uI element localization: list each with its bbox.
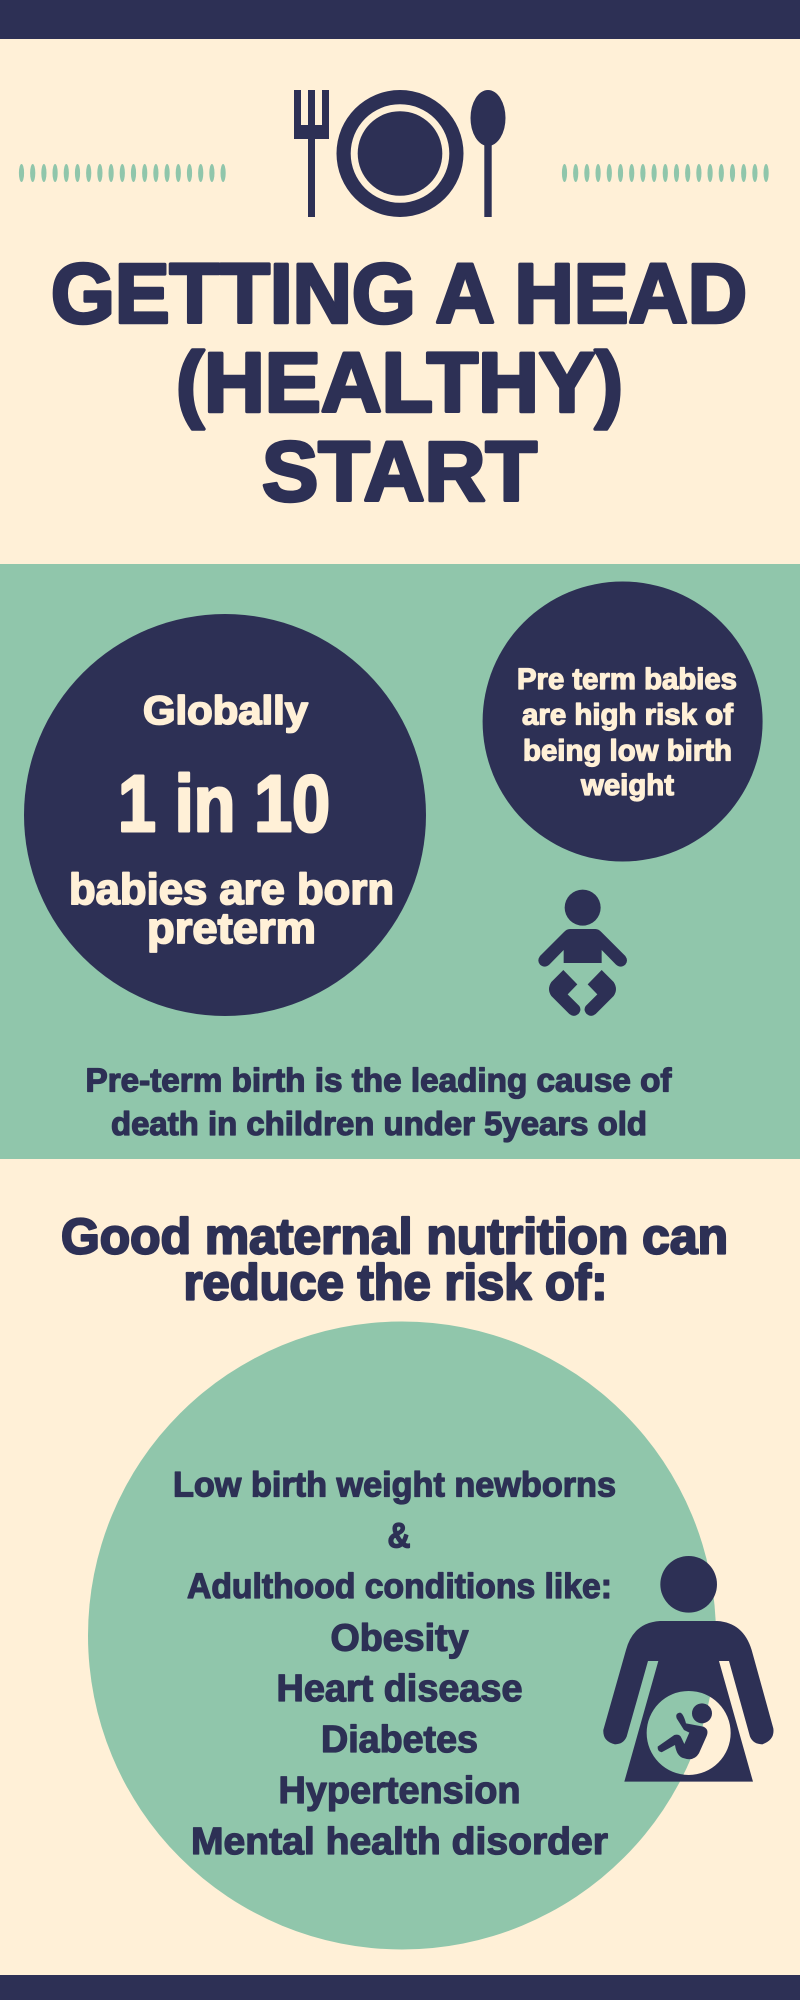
title: GETTING A HEAD [51, 246, 747, 340]
heading: good maternal nutrition [61, 1208, 728, 1310]
icon: baby [538, 890, 627, 1016]
text: list of reduced risks: Obesity [330, 1618, 468, 1660]
circle: low birth weight risk [483, 582, 763, 862]
text: list of reduced risks: Adulthood conditions like: [187, 1567, 612, 1606]
decorative dashes left [19, 164, 226, 182]
text: leading cause of death [86, 1062, 673, 1142]
text: list of reduced risks: & [388, 1516, 410, 1556]
circle: low birth weight risk: are high risk of [522, 698, 734, 732]
circle: low birth weight risk: Pre term babies [517, 663, 737, 696]
text: list of reduced risks: Mental health disorder [191, 1821, 608, 1863]
title [51, 246, 747, 518]
text: leading cause of death: death in children under 5years old [111, 1105, 647, 1142]
heading: good maternal nutrition: reduce the risk of: [184, 1254, 608, 1310]
decorative dashes right [562, 164, 769, 182]
title: START [262, 424, 537, 518]
circle: globally 1 in 10: babies are born [69, 865, 394, 914]
circle: risk list background [88, 1322, 716, 1950]
circle: globally 1 in 10 [24, 614, 426, 1016]
circle: globally 1 in 10: preterm [147, 904, 316, 953]
text: list of reduced risks: Hypertension [278, 1770, 520, 1812]
text: list of reduced risks: Low birth weight newborns [173, 1466, 616, 1504]
title: (HEALTHY) [176, 336, 623, 430]
circle: low birth weight risk: being low birth [523, 734, 732, 768]
circle: globally 1 in 10: Globally [143, 689, 309, 733]
icon: fork, plate and spoon [294, 90, 506, 217]
text: list of reduced risks [173, 1466, 616, 1863]
bottom navy bar [0, 1975, 800, 2000]
icon: pregnant woman [603, 1556, 774, 1782]
text: list of reduced risks: Heart disease [276, 1668, 522, 1710]
heading: good maternal nutrition: Good maternal nutrition can [61, 1208, 728, 1264]
text: leading cause of death: Pre-term birth is the leading cause of [86, 1062, 673, 1098]
text: list of reduced risks: Diabetes [321, 1719, 478, 1761]
panel: preterm birth facts [0, 564, 800, 1159]
circle: globally 1 in 10: 1 in 10 [118, 759, 330, 848]
top navy bar [0, 0, 800, 39]
circle: low birth weight risk: weight [580, 769, 674, 802]
panel background [0, 564, 800, 1159]
